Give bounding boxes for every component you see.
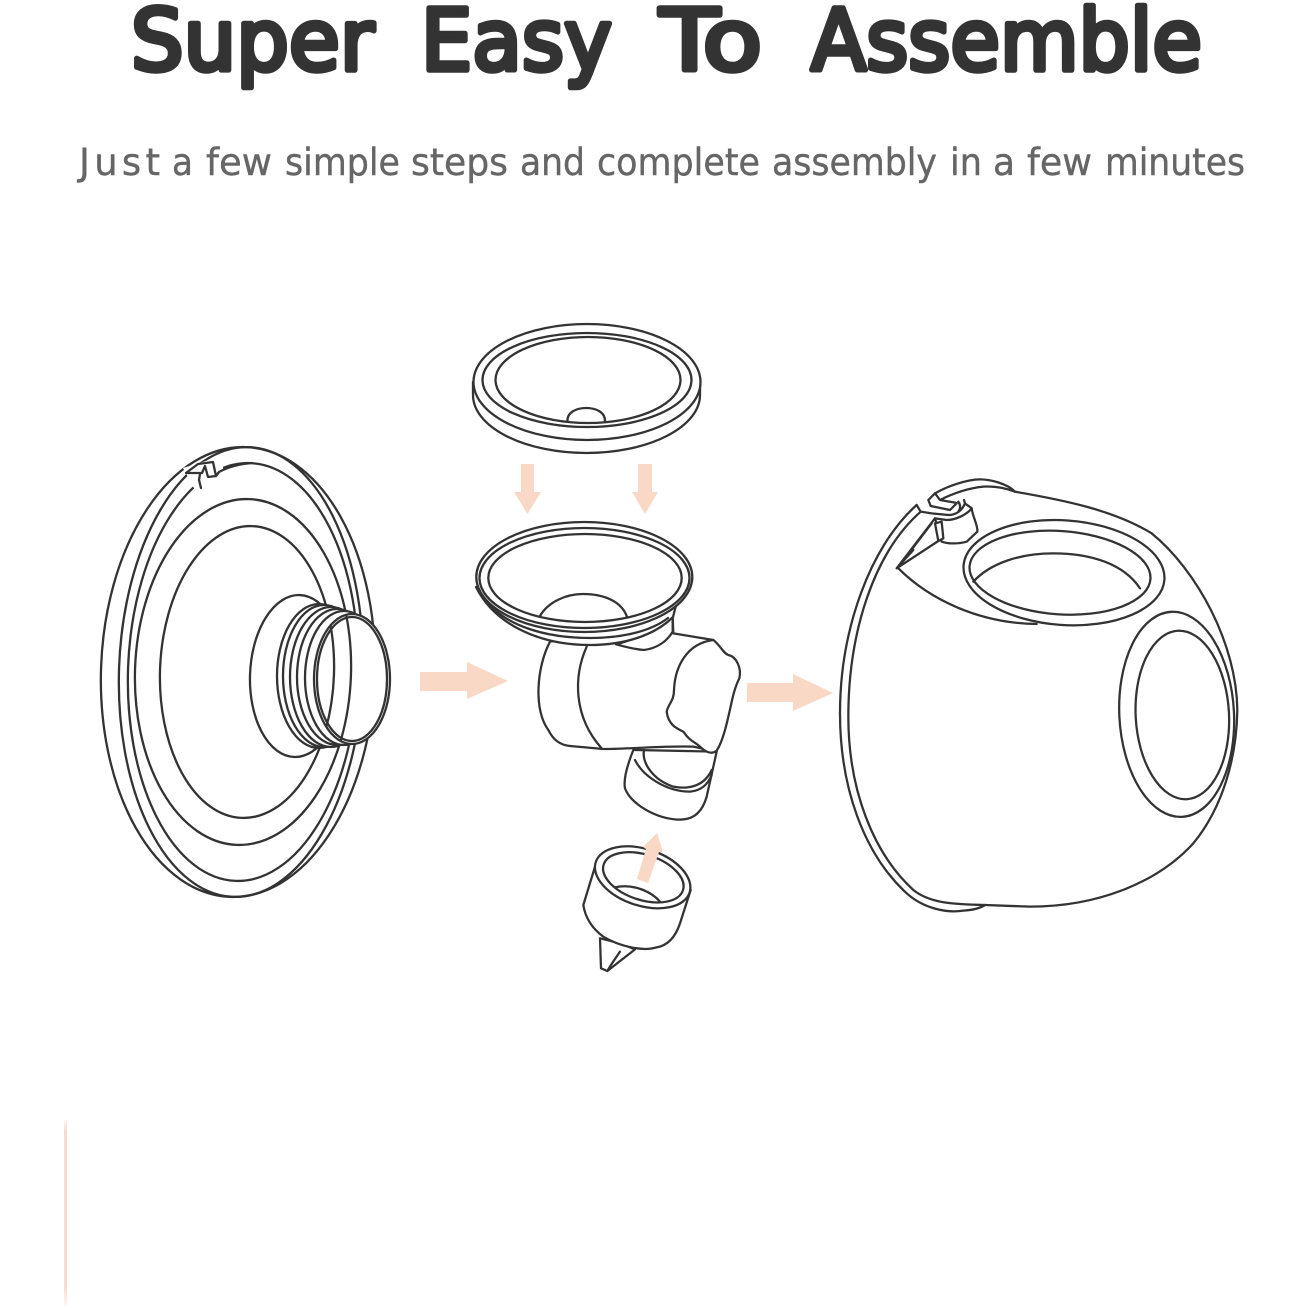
subtitle [77,141,1245,184]
subtitle: and [520,141,585,184]
subtitle: few [1027,141,1092,184]
subtitle: simple [285,141,400,184]
subtitle: complete [597,141,760,184]
subtitle: in [950,141,982,184]
illustration: duckbill valve [583,835,698,971]
arrow: left down [514,464,541,514]
subtitle: steps [411,141,508,184]
illustration: pump body [840,479,1239,911]
illustration: valve disc [473,324,700,453]
subtitle: a [993,141,1015,184]
illustration: breast shield flange [93,442,390,902]
subtitle: assembly [772,141,937,184]
subtitle: few [206,141,272,184]
title [131,0,1202,91]
arrow: right to pump [747,674,833,711]
arrow: right down [632,464,658,514]
subtitle: a [172,141,193,184]
subtitle: minutes [1105,141,1245,184]
decorative pink sliver [64,1120,67,1306]
arrow: right to connector [420,662,508,699]
arrow: diagonal up [637,833,663,883]
illustration: flange funnel [476,522,692,645]
illustration: valve connector body [538,617,740,820]
subtitle: Just [77,141,160,184]
